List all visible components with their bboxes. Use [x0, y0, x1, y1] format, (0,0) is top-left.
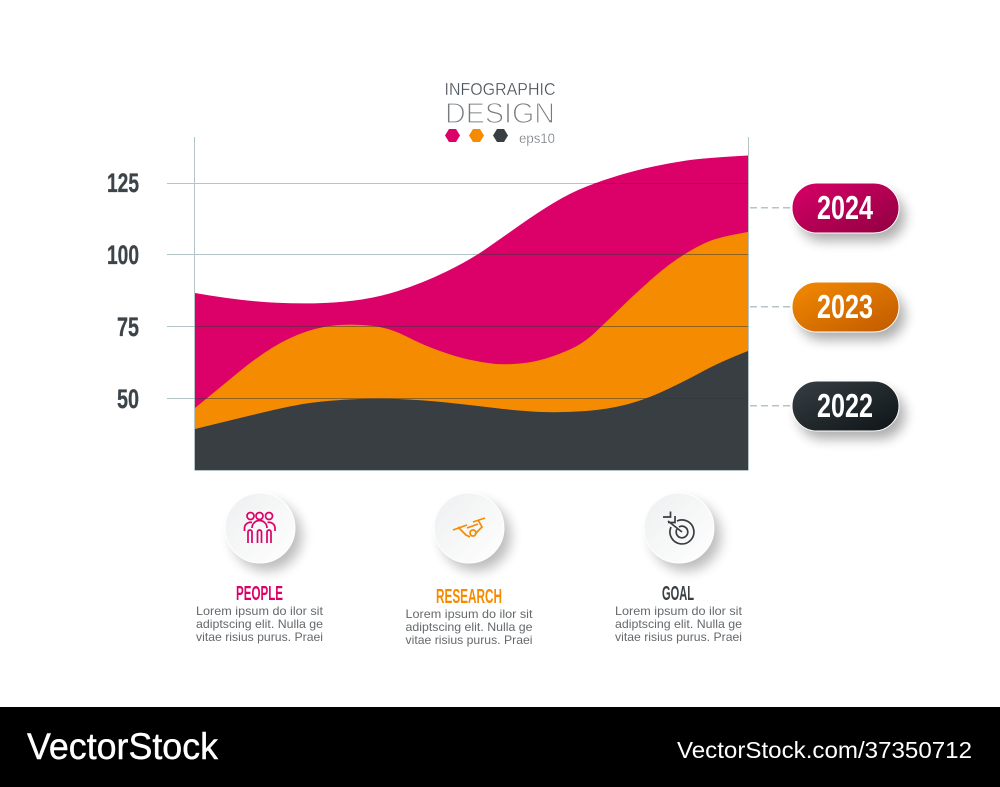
- y axis labels: 125: [107, 168, 139, 198]
- title block: INFOGRAPHIC: [444, 79, 556, 99]
- heading: goal: GOAL: [662, 583, 694, 605]
- heading: people: PEOPLE: [236, 583, 283, 605]
- area chart: [167, 137, 748, 470]
- panel: goal: [615, 493, 743, 644]
- title block: [444, 79, 556, 146]
- y axis labels: 50: [117, 384, 139, 414]
- panel: people: [196, 493, 324, 644]
- text: research: vitae risius purus. Praei: [406, 633, 532, 647]
- title block: eps10: [519, 130, 555, 146]
- text: people: [196, 604, 324, 644]
- pill: 2022: 2022: [817, 387, 873, 424]
- text: goal: [615, 604, 743, 644]
- text: goal: vitae risius purus. Praei: [615, 630, 742, 644]
- text: goal: adiptscing elit. Nulla ge: [615, 617, 742, 631]
- pill: 2024: [792, 183, 905, 241]
- text: people: vitae risius purus. Praei: [196, 630, 323, 644]
- footer bar: [0, 707, 1000, 787]
- footer id: VectorStock.com/37350712: [677, 737, 972, 763]
- light grid lines: [167, 184, 748, 398]
- pill: 2022: [792, 381, 905, 439]
- pill: 2023: [792, 282, 905, 340]
- pill: 2024: 2024: [817, 189, 873, 226]
- connector dashes: [750, 208, 792, 406]
- area: 2024 pink: [195, 156, 748, 470]
- heading: research: RESEARCH: [436, 586, 502, 608]
- y axis labels: [107, 168, 139, 414]
- text: research: Lorem ipsum do ilor sit: [406, 607, 533, 621]
- text: research: [406, 607, 533, 647]
- icon: handshake: [434, 493, 511, 571]
- text: people: adiptscing elit. Nulla ge: [196, 617, 323, 631]
- area: 2022 dark: [195, 351, 748, 470]
- pill: 2023: 2023: [817, 288, 873, 325]
- text: goal: Lorem ipsum do ilor sit: [615, 604, 743, 618]
- title block: DESIGN: [445, 98, 555, 130]
- axis frame lines: [194, 137, 748, 470]
- area: 2023 orange: [195, 232, 748, 470]
- dark grid lines over areas: [195, 184, 748, 398]
- panel: research: [406, 493, 533, 647]
- text: people: Lorem ipsum do ilor sit: [196, 604, 324, 618]
- text: research: adiptscing elit. Nulla ge: [406, 620, 533, 634]
- icon: target: [644, 493, 721, 571]
- y axis labels: 75: [117, 312, 139, 342]
- y axis labels: 100: [107, 240, 139, 270]
- icon: people: [225, 493, 302, 571]
- footer logo: VectorStock: [27, 726, 218, 767]
